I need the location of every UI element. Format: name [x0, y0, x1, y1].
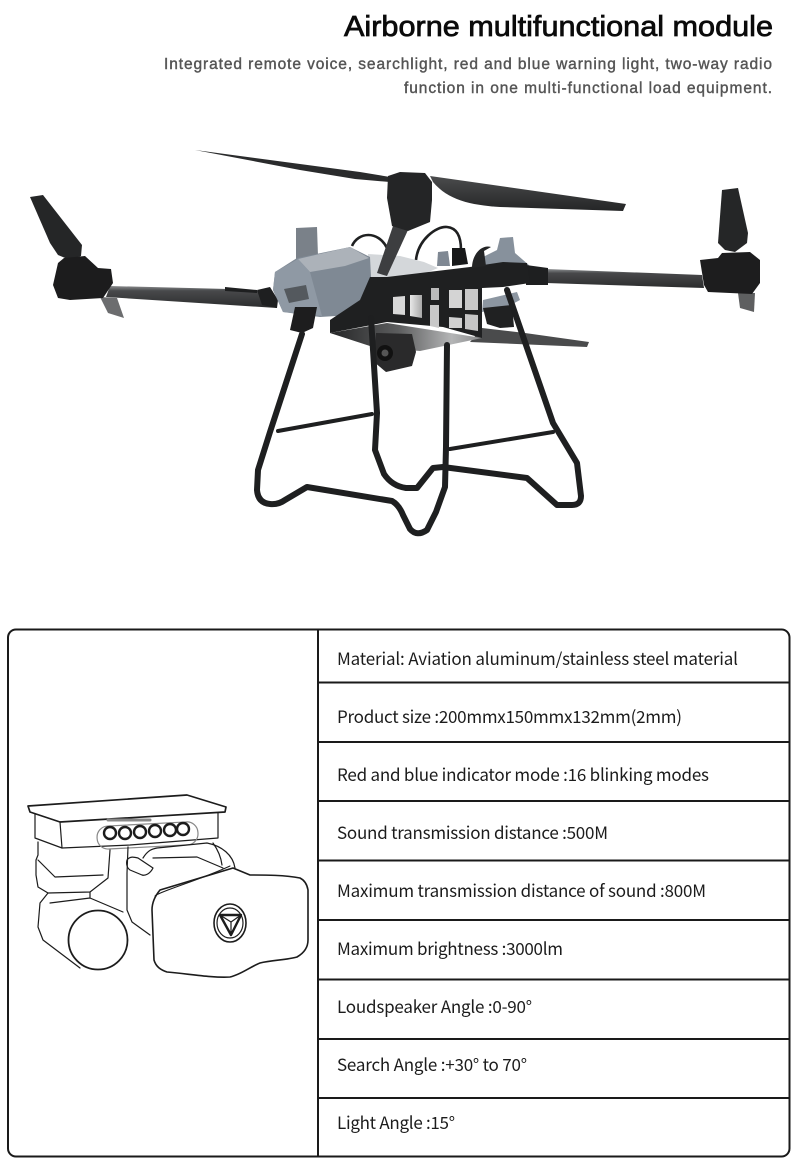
line drawing of module — [28, 795, 308, 977]
row: material: Material: Aviation aluminum/stainless steel material — [337, 645, 738, 670]
speaker logo — [214, 904, 246, 942]
drone left motor and propeller — [30, 195, 124, 318]
drone left bracket — [290, 307, 317, 333]
row: search angle: Search Angle :+30° to 70° — [337, 1051, 527, 1076]
row: loudspeaker angle: Loudspeaker Angle :0-90° — [337, 993, 532, 1018]
drone front arm — [377, 226, 408, 276]
row: sound distance: Sound transmission distance :500M — [337, 819, 608, 844]
LED strip — [96, 820, 199, 850]
drone right arm — [526, 265, 704, 288]
drone grey tower — [296, 227, 318, 262]
top housing — [28, 795, 226, 848]
spec rows text — [337, 645, 738, 1134]
drone white tank top — [368, 254, 438, 284]
row: light angle: Light Angle :15° — [337, 1109, 455, 1134]
row: maximum sound distance: Maximum transmission distance of sound :800M — [337, 877, 706, 902]
subtitle text block: Integrated remote voice, searchlight, red and blue warning light, two-way radio — [164, 56, 772, 73]
drone grey body shell — [273, 247, 372, 317]
drone rear parts — [437, 237, 589, 347]
drone top motor and propeller — [195, 150, 626, 231]
drone cables — [352, 227, 461, 260]
subtitle text block: function in one multi-functional load equipment. — [404, 80, 772, 97]
connecting arm and small cylinder — [127, 843, 235, 935]
drone gimbal camera — [374, 333, 416, 372]
drone lower plate — [330, 323, 482, 351]
drone left arm — [106, 286, 278, 308]
drone landing gear — [257, 290, 581, 533]
table frame — [8, 630, 790, 1157]
drone right motor and propeller — [700, 188, 760, 312]
row: brightness: Maximum brightness :3000lm — [337, 935, 563, 960]
gimbal camera — [36, 842, 128, 970]
row: product size: Product size :200mmx150mmx132mm(2mm) — [337, 703, 682, 728]
subtitle text block — [164, 56, 772, 97]
spec table panel — [8, 630, 790, 1157]
title: Airborne multifunctional module — [344, 11, 773, 43]
row: indicator mode: Red and blue indicator mode :16 blinking modes — [337, 761, 709, 786]
drone black frame with windows — [330, 246, 530, 338]
drone illustration — [30, 150, 760, 533]
speaker body — [152, 866, 308, 977]
